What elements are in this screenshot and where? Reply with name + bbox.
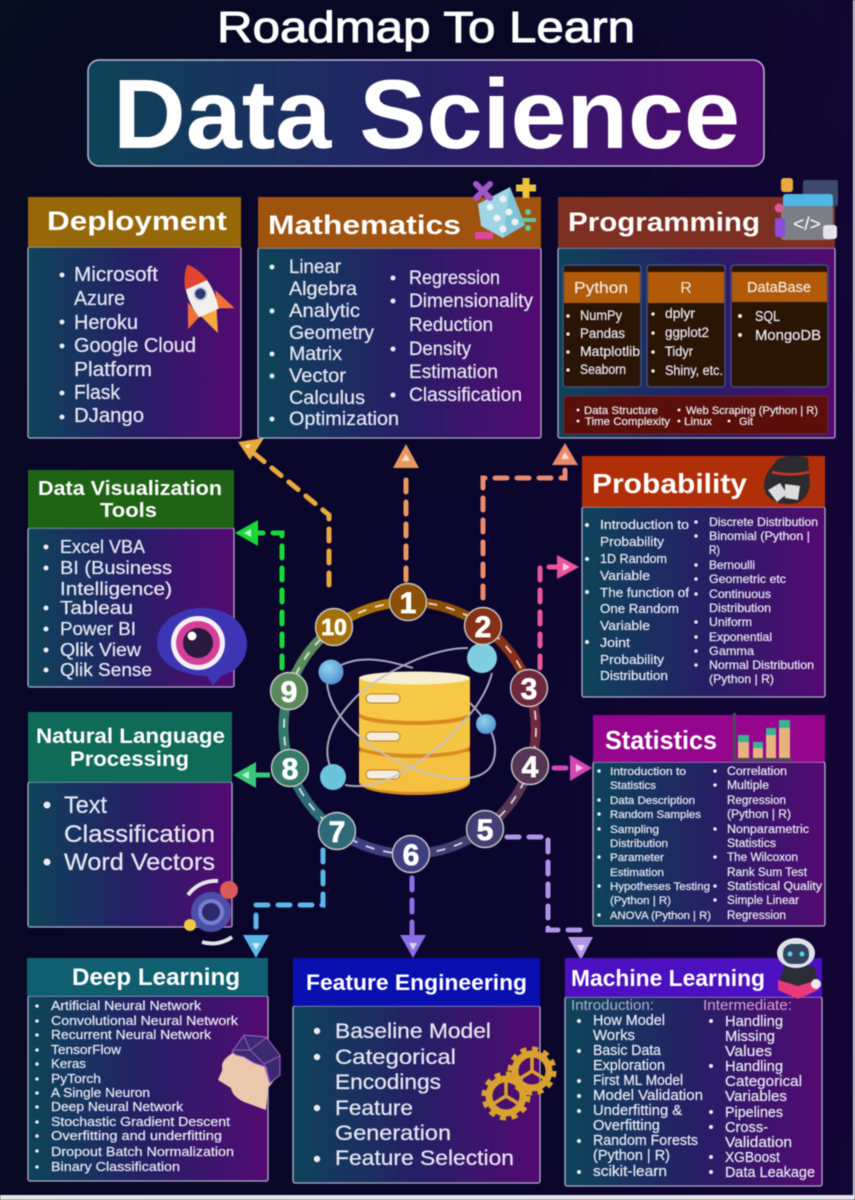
arrow: to deployment [238,438,329,585]
list: probability left: Probability [600,534,665,549]
list: statistics left: Random Samples [610,809,702,821]
sub-panel: R: dplyr [665,306,696,321]
cylinder tier 1 [359,672,470,725]
sub-panel: other topics: Git [739,416,753,428]
icon: robot reading book [777,938,821,999]
sub-panel: python: Python [574,280,628,297]
list: feature engineering: Generation [335,1121,451,1145]
node 3: 3 [521,673,537,706]
list: deep learning: Convolutional Neural Network [51,1013,239,1028]
list: statistics left: Estimation [610,867,664,879]
list: deep learning: Stochastic Gradient Descent [51,1114,230,1129]
list: machine learning introduction: Exploration [593,1058,665,1074]
list: probability right: Uniform [709,615,752,629]
list: probability right: Gamma [709,644,754,658]
node 3 [510,670,548,706]
heading: data visualization tools: Data Visualization [38,478,222,500]
list: feature engineering: Baseline Model [335,1019,491,1043]
node 9: 9 [281,676,297,709]
list: deployment: Azure [74,288,125,310]
sub-panel: other topics: Time Complexity [585,416,671,428]
node 8 [272,750,308,786]
list: deep learning [37,998,239,1174]
sub-panel: R: R [680,280,692,297]
arrow: to machine learning [507,837,593,960]
heading: deployment: Deployment [47,206,227,236]
list: feature engineering: Feature [335,1096,413,1120]
list: deep learning: Recurrent Neural Network [51,1027,212,1042]
ring segments [283,602,536,854]
list: probability left: One Random [600,601,679,616]
list: deep learning: PyTorch [51,1071,101,1086]
list: mathematics left: Vector [289,366,347,387]
icon: rocket [164,254,241,344]
list: statistics left: Statistics [610,780,657,792]
list: probability right: Exponential [709,630,772,644]
list: mathematics left: Optimization [289,409,399,430]
arrow: to data visualization [235,520,282,668]
list: probability left: 1D Random [600,551,667,566]
list: mathematics left: Linear [289,257,342,278]
arrow: to programming [483,443,578,598]
list: statistics left: Distribution [610,838,668,850]
sub-panel: python: Pandas [580,326,625,341]
list: deployment: Flask [74,382,121,404]
heading: natural language processing: Processing [70,748,189,771]
list: deployment: DJango [74,405,144,427]
node 1 [390,584,426,620]
list: machine learning introduction [579,1013,703,1180]
arrow: to NLP [233,762,270,788]
list: statistics left: Hypotheses Testing [610,881,710,893]
cylinder tier 3 [359,750,470,795]
panel: statistics [593,713,825,926]
list: natural language processing [47,792,215,876]
list: deployment: Microsoft [74,264,158,286]
list: machine learning intermediate [711,1013,815,1181]
list: deep learning: TensorFlow [51,1042,122,1057]
list: probability right: (Python | R) [709,672,774,686]
list: mathematics right: Density [409,339,471,360]
list: deep learning: Deep Neural Network [51,1099,184,1114]
icon: magic hat with dice [764,456,810,504]
arrow: to feature engineering [400,878,426,958]
list: statistics right: Statistics [727,838,776,850]
list: mathematics left: Algebra [289,279,357,300]
list: feature engineering [317,1019,514,1170]
list: mathematics left: Geometry [289,323,374,344]
node 4 [512,748,548,784]
list: deep learning: Binary Classification [51,1159,180,1174]
list: statistics right [715,766,822,922]
list: data visualization tools: Qlik View [60,640,142,660]
list: probability right: R) [709,543,720,557]
list: machine learning introduction: Basic Data [593,1043,662,1059]
list: statistics right: Statistical Quality [727,881,822,893]
list: mathematics right: Estimation [409,362,498,383]
heading: statistics [593,715,825,762]
heading: programming [558,197,835,248]
orbit lines [327,648,495,786]
list: machine learning intermediate: Handling [725,1013,783,1030]
list: mathematics right: Classification [409,385,522,406]
list: deployment [62,264,196,427]
list: data visualization tools: Intelligence) [60,579,172,599]
heading: data visualization tools: Tools [100,500,157,522]
list: machine learning introduction: How Model [593,1013,665,1029]
list: mathematics right: Dimensionality [409,291,534,312]
list: natural language processing: Classification [64,821,215,848]
subheading: introduction: Introduction: [571,997,654,1014]
list: probability right: Discrete Distribution [709,515,818,529]
icon: gear and process cycle [184,881,238,944]
sub-panel: python: Seaborn [580,362,626,377]
list: statistics left: (Python | R) [610,895,671,907]
list: deep learning: Overfitting and underfitting [51,1128,222,1143]
sub-panel: other topics [564,396,828,434]
panel: natural language processing [28,712,238,944]
list: mathematics left: Matrix [289,344,342,365]
sub-panel: python [563,265,641,387]
list: statistics right: Nonparametric [727,824,809,836]
cylinder tier 2 [359,714,470,758]
list: data visualization tools: Excel VBA [60,537,145,557]
list: probability left [587,517,689,683]
list: mathematics right: Regression [409,268,500,289]
list: statistics right: (Python | R) [727,809,791,821]
arrow: to deep learning [243,850,323,958]
list: deep learning: Dropout Batch Normalization [51,1144,234,1159]
list: statistics right: Regression [727,910,786,922]
node 6: 6 [403,839,419,872]
sub-panel: python: NumPy [580,308,622,323]
list: machine learning intermediate: Categorical [725,1073,802,1090]
database icon with orbits [318,643,497,795]
heading: programming: Programming [568,207,760,237]
heading: mathematics: Mathematics [268,210,461,240]
list: machine learning intermediate: Missing [725,1028,775,1045]
list: machine learning intermediate: Pipelines [725,1104,783,1121]
heading: feature engineering [293,958,540,1006]
panel: probability [582,456,825,697]
list: mathematics left [272,257,399,430]
list: statistics right: The Wilcoxon [727,852,798,864]
list: probability left: Joint [600,635,630,650]
list: feature engineering: Encodings [335,1070,441,1094]
list: data visualization tools [46,537,172,680]
list: machine learning intermediate: Cross- [725,1119,768,1136]
sub-panel: other topics: Data Structure [584,405,658,417]
icon: head with neural mesh [218,1035,280,1110]
list: probability right: Continuous [709,587,771,601]
list: machine learning introduction: First ML Model [593,1073,683,1089]
arrow: to mathematics [393,444,419,580]
list: machine learning intermediate: Validation [725,1134,792,1151]
list: probability left: Variable [600,618,650,633]
node 10: 10 [321,614,347,640]
heading: data visualization tools [28,470,234,528]
node 6 [392,836,430,872]
node 4: 4 [522,751,539,784]
list: data visualization tools: Power BI [60,619,136,639]
list: machine learning introduction: Works [593,1028,635,1044]
sub-panel: database: DataBase [747,280,811,296]
list: machine learning introduction: Overfitting [593,1118,660,1134]
node 7: 7 [329,816,345,849]
sub-panel: R: Shiny, etc. [665,363,723,378]
list: deep learning: Artificial Neural Network [51,998,202,1013]
list: probability right: Normal Distribution [709,658,814,672]
node 10 [316,608,352,646]
list: deployment: Google Cloud [74,335,196,357]
list: deployment: Platform [74,359,152,381]
sub-panel: R: ggplot2 [665,325,709,340]
list: probability right: Binomial (Python | [709,529,810,543]
icon: code folder: </> [793,214,821,234]
list: probability right: Bernoulli [709,558,755,572]
sub-panel: database [731,265,828,387]
list: machine learning intermediate: Variables [725,1088,787,1105]
icon: code folder [774,178,838,240]
list: statistics right: Multiple [727,780,769,792]
arrow: to statistics [554,755,592,781]
icon: eye speech bubble [157,608,247,686]
list: feature engineering: Categorical [335,1045,456,1069]
arrows connecting ring to panels [233,438,593,960]
panel: data visualization tools [28,470,247,687]
list: statistics left: Sampling [610,824,659,836]
subheading: intermediate: Intermediate: [703,997,792,1014]
list: probability right: Geometric etc [709,572,786,586]
list: machine learning introduction: Random Forests [593,1133,698,1149]
heading: natural language processing [28,712,232,782]
list: machine learning intermediate: Handling [725,1058,783,1075]
list: machine learning introduction: Model Validation [593,1088,703,1104]
list: probability right: Distribution [709,601,771,615]
panel: deployment [28,197,241,438]
list: statistics right: Rank Sum Test [727,867,808,879]
list: deep learning: A Single Neuron [51,1085,150,1100]
list: data visualization tools: Tableau [60,598,133,618]
list: natural language processing: Word Vectors [64,849,215,876]
node 2 [464,608,502,644]
list: probability left: The function of [600,585,689,600]
list: probability left: Variable [600,568,650,583]
node 1: 1 [400,587,416,620]
list: probability left: Probability [600,652,665,667]
title: Roadmap To Learn [217,3,635,52]
list: machine learning introduction: scikit-learn [593,1164,667,1180]
icon: math dice [475,178,536,239]
sub-panel: database: SQL [755,308,780,325]
list: statistics left: ANOVA (Python | R) [610,910,711,922]
panel: mathematics [258,178,541,438]
central ring [270,584,548,872]
arrow: to probability [540,555,579,668]
list: mathematics left: Analytic [289,301,360,322]
orbit spheres [318,643,497,790]
panel: programming [558,178,838,438]
node 7 [318,812,356,850]
sub-panel: R [647,265,725,387]
title banner: Data Science [113,59,740,169]
node 9 [270,672,308,710]
list: probability right [696,515,818,686]
list: feature engineering: Feature Selection [335,1146,514,1170]
list: statistics left: Introduction to [610,766,686,778]
list: statistics right: Correlation [727,766,787,778]
sub-panel: other topics: Linux [684,416,713,428]
icon: gears [484,1049,554,1118]
list: deployment: Heroku [74,312,138,334]
list: mathematics left: Calculus [289,388,365,409]
heading: probability: Probability [592,468,747,499]
list: machine learning intermediate: Data Leakage [725,1164,815,1181]
heading: deep learning [27,958,268,996]
node 8: 8 [282,753,298,786]
icon: bar chart [733,713,793,761]
list: mathematics right: Reduction [409,315,493,336]
heading: feature engineering: Feature Engineering [306,970,527,995]
heading: statistics: Statistics [605,725,717,755]
list: data visualization tools: Qlik Sense [60,660,152,680]
panel: machine learning [565,938,822,1186]
sub-panel: database: MongoDB [755,327,821,344]
sub-panel: python: Matplotlib [580,344,640,359]
heading: machine learning: Machine Learning [571,965,765,991]
list: probability left: Introduction to [600,517,689,532]
heading: probability [582,456,825,507]
list: probability left: Distribution [600,668,668,683]
list: mathematics right [393,268,534,406]
sub-panel: R: Tidyr [665,344,693,359]
sub-panel: other topics: Web Scraping (Python | R) [686,405,818,417]
list: statistics left: Parameter [610,852,664,864]
list: machine learning introduction: (Python | R) [593,1148,670,1164]
panel: deep learning [27,958,280,1181]
node 5 [466,810,504,848]
list: machine learning intermediate: Values [725,1043,772,1060]
node 2: 2 [475,611,491,644]
list: machine learning intermediate: XGBoost [725,1149,781,1166]
list: data visualization tools: BI (Business [60,558,172,578]
list: statistics right: Regression [727,795,786,807]
heading: mathematics [258,197,541,248]
list: machine learning introduction: Underfitting & [593,1103,682,1119]
list: statistics right: Simple Linear [727,895,799,907]
panel: feature engineering [293,958,554,1183]
node 5: 5 [477,814,493,847]
list: statistics left [599,766,711,922]
list: statistics left: Data Description [610,795,695,807]
heading: natural language processing: Natural Language [36,725,225,748]
list: deep learning: Keras [51,1056,87,1071]
list: natural language processing: Text [64,792,107,819]
heading: deployment [28,197,241,247]
heading: deep learning: Deep Learning [72,964,240,991]
heading: machine learning [565,958,822,997]
